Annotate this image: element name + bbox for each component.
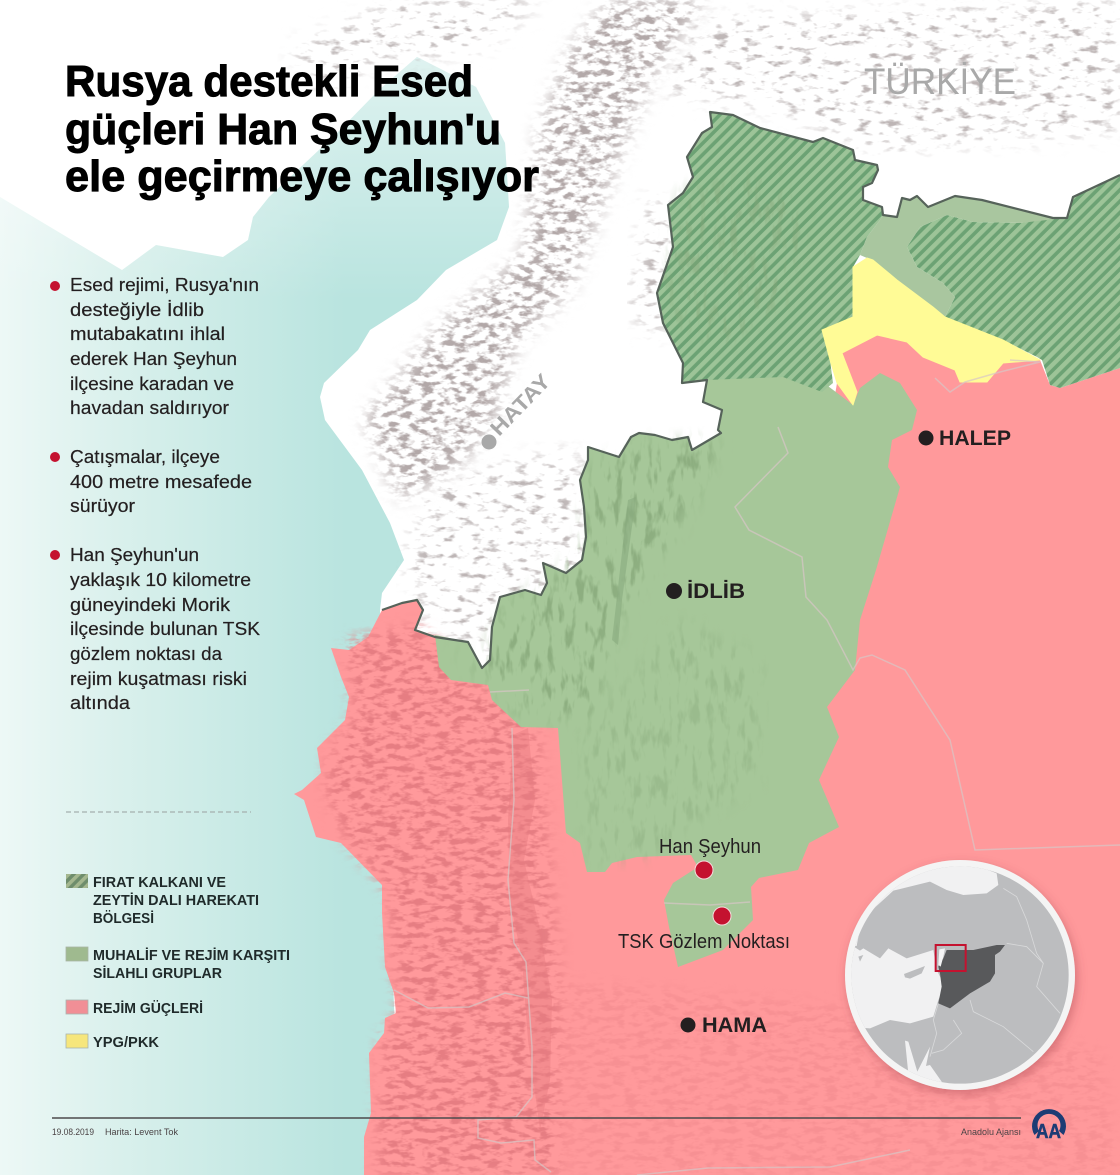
label: İdlib xyxy=(666,580,745,603)
legend item: YPG/PKK xyxy=(66,1034,160,1051)
region: regime forces xyxy=(294,335,1120,1175)
bullet 3: gözlem noktası da xyxy=(70,644,223,664)
marker: Han Şeyhun: Han Şeyhun xyxy=(659,836,761,858)
administrative boundaries xyxy=(394,360,1120,1175)
legend xyxy=(66,874,290,1051)
region: opposition groups xyxy=(435,370,917,967)
legend item: Fırat Kalkanı ve Zeytin Dalı: BÖLGESİ xyxy=(93,910,154,927)
label: Hatay xyxy=(482,370,555,450)
bullet 1: desteğiyle İdlib xyxy=(70,300,204,320)
bullet 1: havadan saldırıyor xyxy=(70,398,229,418)
region: Fırat Kalkanı east (Azez, Bab) xyxy=(907,175,1120,388)
sea xyxy=(0,57,509,1175)
bullet 2: Çatışmalar, ilçeye xyxy=(70,447,220,467)
legend item: Fırat Kalkanı ve Zeytin Dalı: ZEYTİN DALI HAREKATI xyxy=(93,892,259,909)
bullet 3: rejim kuşatması riski xyxy=(70,669,247,689)
bullet 1 xyxy=(50,275,259,418)
footer credits: 19.08.2019 xyxy=(52,1127,94,1138)
label: Hatay: HATAY xyxy=(486,370,555,440)
bullet 3 xyxy=(50,545,260,713)
bullet 1: ederek Han Şeyhun xyxy=(70,349,237,369)
bullet 1: Esed rejimi, Rusya'nın xyxy=(70,275,259,295)
footer credits: Harita: Levent Tok xyxy=(105,1127,178,1138)
bullet 3: güneyindeki Morik xyxy=(70,595,231,615)
label: Hama: HAMA xyxy=(702,1014,767,1037)
marker: TSK Gözlem Noktası xyxy=(618,907,790,953)
source text: Anadolu Ajansı xyxy=(961,1127,1021,1138)
bullet 1: ilçesine karadan ve xyxy=(70,374,234,394)
label: İdlib: İDLİB xyxy=(687,580,745,603)
label: Halep: HALEP xyxy=(939,427,1011,450)
bullet 2: 400 metre mesafede xyxy=(70,472,252,492)
marker: Han Şeyhun xyxy=(659,836,761,879)
terrain: mountains on white land xyxy=(290,0,1120,660)
legend item: YPG/PKK: YPG/PKK xyxy=(93,1035,160,1051)
legend item: rejim güçleri: REJİM GÜÇLERİ xyxy=(93,1000,203,1017)
bullet 1: mutabakatını ihlal xyxy=(70,324,225,344)
bullet 2 xyxy=(50,447,252,516)
legend item: muhalif gruplar xyxy=(66,947,290,982)
logo: Anadolu Ajansı: AA xyxy=(1036,1121,1061,1143)
bullet 3: altında xyxy=(70,693,131,713)
legend item: muhalif gruplar: MUHALİF VE REJİM KARŞITI xyxy=(93,947,290,964)
title: güçleri Han Şeyhun'u xyxy=(65,105,501,154)
title: Rusya destekli Esed xyxy=(65,57,473,106)
marker: TSK Gözlem Noktası: TSK Gözlem Noktası xyxy=(618,931,790,953)
legend item: Fırat Kalkanı ve Zeytin Dalı xyxy=(66,874,259,927)
footer credits xyxy=(52,1127,178,1138)
bullet 3: ilçesinde bulunan TSK xyxy=(70,619,260,639)
bullet 3: Han Şeyhun'un xyxy=(70,545,199,565)
bullet 2: sürüyor xyxy=(70,496,135,516)
title: ele geçirmeye çalışıyor xyxy=(65,152,539,201)
bullet 3: yaklaşık 10 kilometre xyxy=(70,570,251,590)
legend item: Fırat Kalkanı ve Zeytin Dalı: FIRAT KALKANI VE xyxy=(93,875,226,891)
title xyxy=(65,57,539,201)
logo: Anadolu Ajansı xyxy=(1032,1109,1066,1143)
region: Fırat Kalkanı and Zeytin Dalı west (Afrin) xyxy=(657,112,883,392)
legend item: muhalif gruplar: SİLAHLI GRUPLAR xyxy=(93,965,223,982)
locator inset map xyxy=(840,860,1075,1093)
label: Türkiye: TÜRKİYE xyxy=(864,61,1016,102)
border lines xyxy=(382,112,1120,668)
region: opposition strip north of Aleppo xyxy=(860,196,1053,317)
footer rule xyxy=(52,1117,1021,1119)
region: YPG/PKK xyxy=(822,258,1040,405)
